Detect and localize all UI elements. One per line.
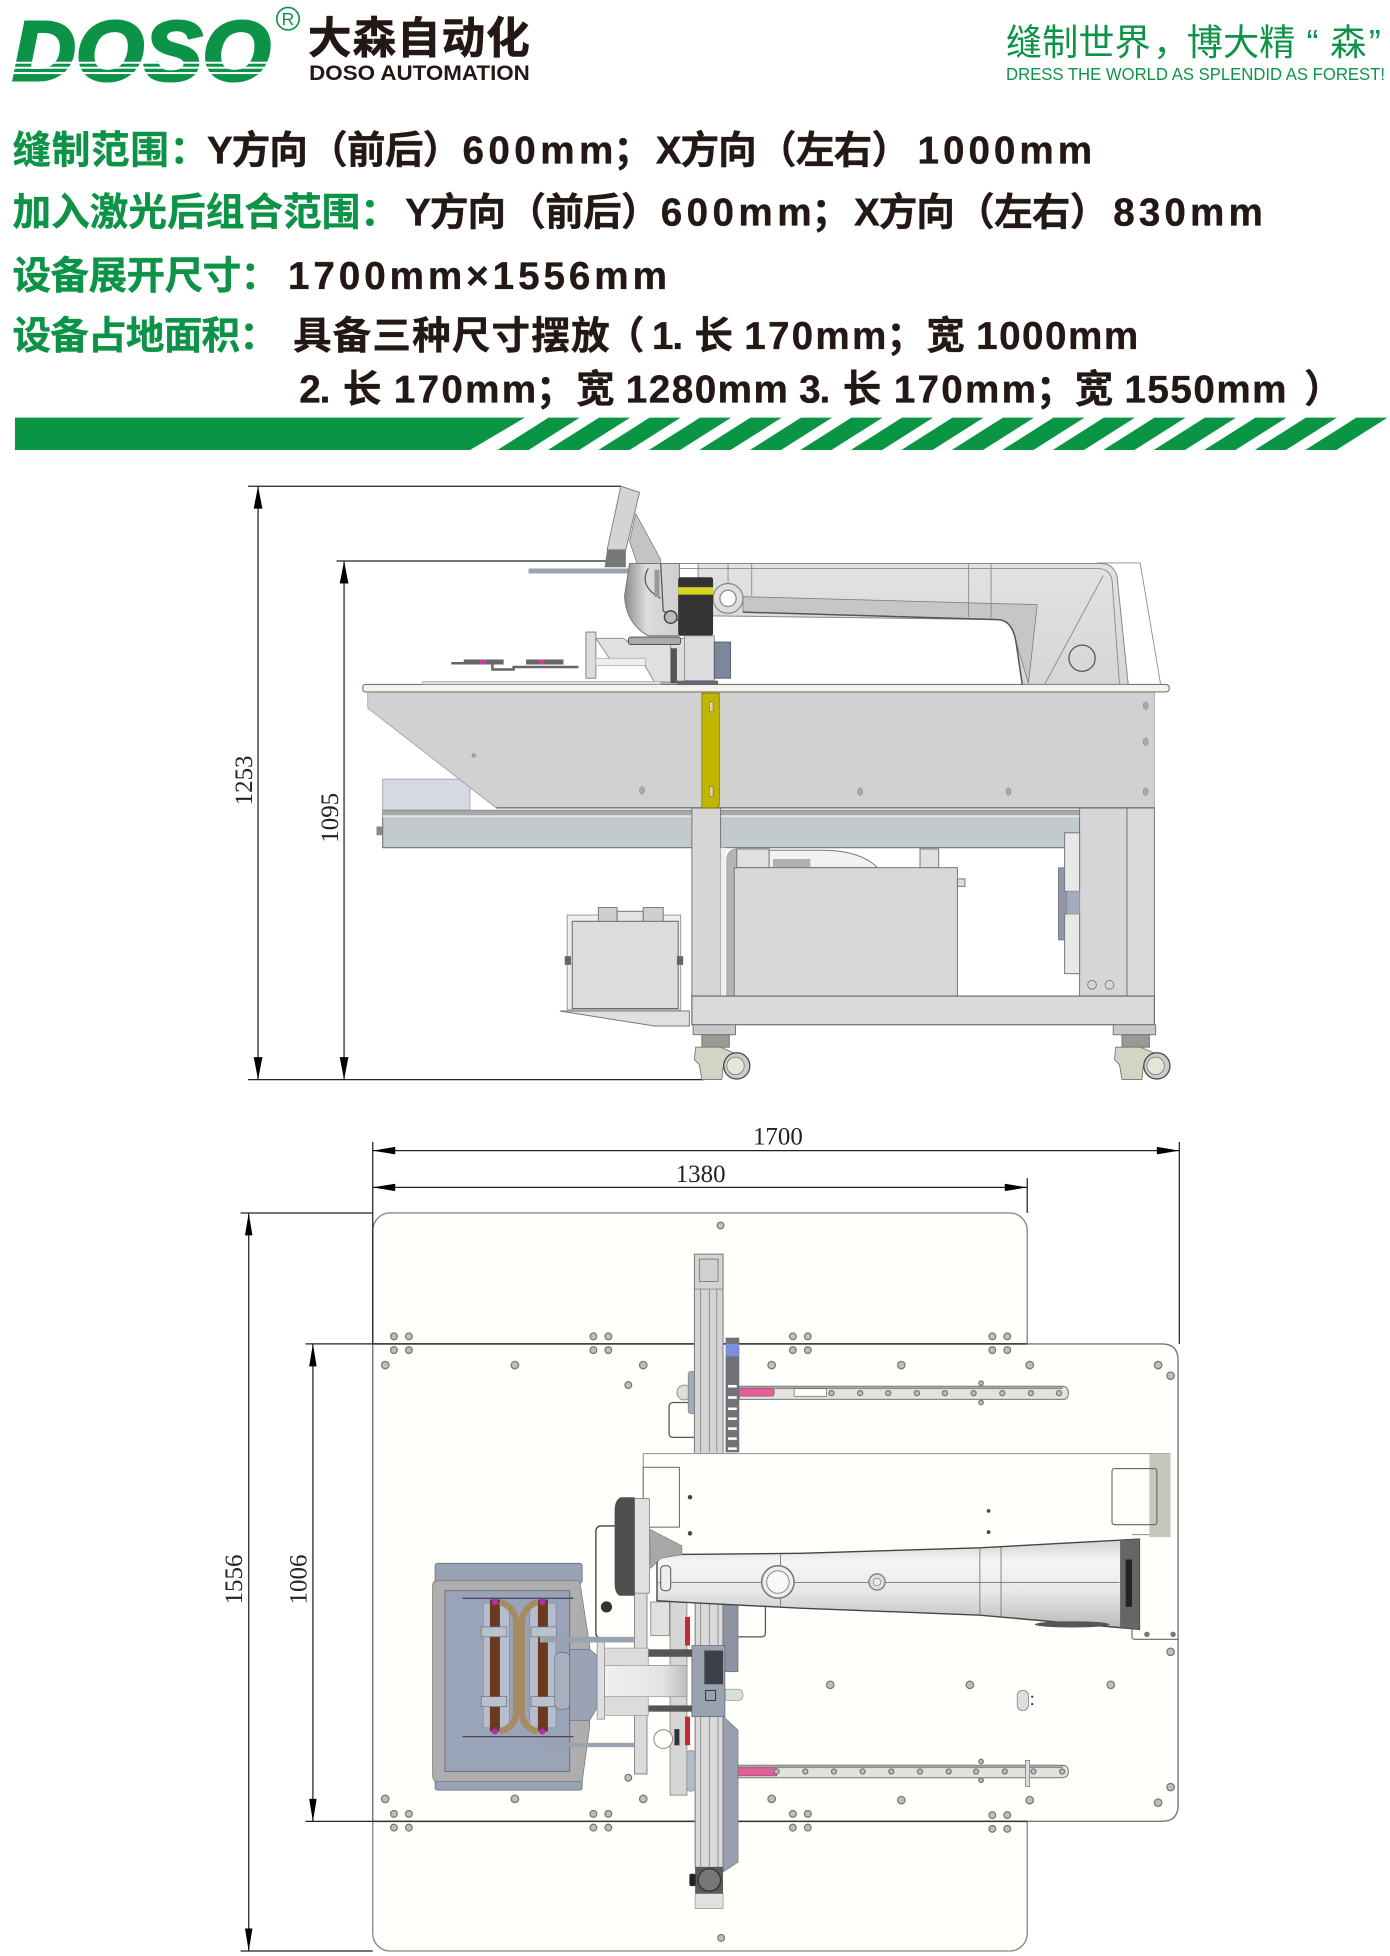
spec: floor area: ； [536,369,575,412]
spec: floor area: （ [606,315,644,358]
spec: sewing range [12,129,1092,172]
company name english: DOSO AUTOMATION [309,62,530,85]
sewing head [625,563,683,636]
side switch module [1058,833,1080,974]
spec: sewing range: ； [613,129,652,172]
spec: sewing range: X方向 [656,129,757,172]
gantry rail lower [689,1602,738,1909]
strip with red cylinders [651,1599,695,1795]
slogan chinese: 博大精 [1187,22,1295,63]
horizontal plate [529,568,628,573]
lower slot bar [738,1759,1068,1786]
spec: laser combined range: （左右） [956,192,1108,235]
top and bottom clamp rods [463,1598,573,1737]
registered mark: R [282,9,294,29]
gantry rail upper [694,1254,723,1454]
spec: floor area: 宽 [1075,369,1113,412]
lower right notch [1132,1629,1178,1639]
spec: floor area: 具备三种尺寸摆放 [293,315,610,358]
slogan chinese: 缝制世界 [1006,22,1151,63]
spec: floor area: 长 [843,369,881,412]
spec: laser combined range: Y方向 [405,192,506,235]
spec: laser combined range: ； [812,192,850,235]
slogan chinese [1006,22,1381,63]
spec: sewing range: Y方向 [207,129,308,172]
spec: unfolded size [12,255,667,298]
sewing arm [630,563,1128,684]
clamp grey frame [433,1581,590,1781]
spec: laser combined range: X方向 [854,192,955,235]
top view dimension 1700 [373,1123,1179,1344]
crossbars [481,1627,557,1707]
clamp blue inner plate [445,1591,570,1771]
clamp drive blocks [555,1642,605,1720]
grey table underbody panel [368,692,1154,808]
table frame legs and base [692,808,1154,1025]
slogan chinese: 森 [1330,22,1366,63]
small bracket right of gantry [729,1602,765,1637]
round knob upper bracket [669,1371,696,1437]
spec: floor area: 1. [652,315,683,358]
spec: floor area: 170mm [744,315,886,358]
spec: floor area: 1000mm [976,315,1138,358]
spec: unfolded size: 设备展开尺寸： [12,255,279,298]
logo: DOSO: DOSO [12,3,271,98]
spec: laser combined range: 830mm [1113,192,1263,235]
top view dimension 1700: 1700 [753,1123,803,1150]
arm mount plate outline [643,1454,1171,1537]
presser clamp assembly [423,632,681,684]
purple bolts [492,1599,545,1735]
spec: floor area: 设备占地面积： [12,315,278,358]
spec: laser combined range: 加入激光后组合范围： [12,192,399,235]
slogan chinese: ， [1153,22,1189,63]
spec: laser combined range: （前后） [507,192,659,235]
side view dimension 1095 [317,561,623,1080]
top view dimension 1006: 1006 [286,1555,313,1604]
spec: floor area: 1280mm [626,369,788,412]
spec: floor area: 2. [299,369,330,412]
clamp plate assembly [433,1563,635,1790]
spec: floor area: 3. [799,369,830,412]
vertical support panel [635,1499,647,1774]
spec: floor area: ） [1304,369,1343,412]
slogan chinese: ” [1369,22,1381,63]
monitor top view [615,1497,649,1596]
side view dimension 1253 [231,486,704,1080]
company name: 大森自动化 [308,16,530,64]
cable loop and dark knob [596,1526,646,1638]
spec: floor area: 宽 [926,315,965,358]
side view drawing [231,486,1170,1080]
monitor on side view [605,486,661,567]
cable chain upper [726,1338,739,1452]
light rails [483,1603,556,1728]
spec: floor area [12,315,1343,412]
spec: unfolded size: 1700mm×1556mm [288,255,667,298]
spec: floor area: 170mm [394,369,536,412]
upper slot bar [728,1381,1068,1405]
spec: floor area: 170mm [894,369,1036,412]
linear rail behind table [376,779,1080,848]
blower unit behind big box [727,849,965,997]
spec: floor area: ； [1036,369,1075,412]
spec: laser combined range [12,192,1263,235]
slogan chinese: “ [1306,22,1319,63]
motor base block [658,636,731,685]
spec: floor area: 长 [343,369,381,412]
table plate wide [373,1344,1178,1821]
top view dimension 1556: 1556 [221,1555,248,1604]
pneumatic cylinders [648,1649,692,1712]
side view dimension 1253: 1253 [231,755,258,805]
table top [363,684,1169,692]
left caster [693,1025,750,1080]
spec: sewing range: （左右） [758,129,910,172]
backing plate outline [1097,563,1161,684]
top view dimension 1556 [221,1213,373,1951]
side view dimension 1095: 1095 [317,793,344,843]
spec: floor area: 长 [694,315,733,358]
mounting holes [381,1222,1174,1941]
green striped divider bar [15,418,1388,450]
carriage plate with terminals [692,1646,743,1717]
spec: floor area: ； [886,315,925,358]
top view dimension 1006 [286,1344,373,1821]
small filter box [560,908,689,1026]
top view drawing [221,1123,1179,1951]
spec: floor area: 宽 [576,369,615,412]
brown strips [490,1599,548,1732]
clamp outer tabs [435,1563,582,1790]
spec: sewing range: 1000mm [918,129,1092,172]
spec: floor area: 1550mm [1124,369,1287,412]
table plate tall [373,1213,1027,1951]
spec: sewing range: 600mm [463,129,613,172]
tan curved clamps [500,1602,537,1732]
yellow bracket [702,693,719,808]
registered mark [277,7,299,30]
sewing arm top view [657,1539,1139,1629]
servo motor [678,577,713,636]
small cylinder part [1017,1690,1033,1710]
top view dimension 1380: 1380 [676,1161,726,1188]
spec: sewing range: （前后） [309,129,461,172]
connecting body [605,1648,687,1715]
big electrical box [734,868,957,996]
spec: laser combined range: 600mm [661,192,812,235]
header [7,3,1385,98]
horizontal support rods [540,1637,635,1747]
top view dimension 1380 [373,1161,1027,1213]
wedge under monitor [649,1529,682,1568]
spec: sewing range: 缝制范围： [12,129,208,172]
specification text block [12,129,1343,412]
right caster [1113,1025,1170,1080]
